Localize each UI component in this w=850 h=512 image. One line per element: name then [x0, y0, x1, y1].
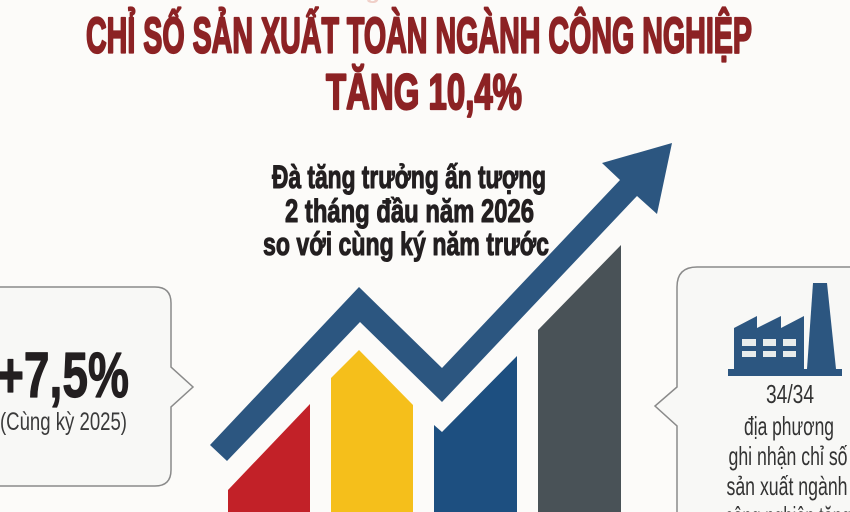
callout caption: (Cùng kỳ 2025) — [0, 408, 127, 436]
bar: red — [228, 404, 310, 512]
panel: localities callout — [655, 267, 850, 512]
bar: gray — [538, 245, 621, 512]
title: TĂNG 10,4% — [326, 64, 522, 120]
icon: factory — [728, 283, 842, 376]
subtitle text block — [263, 159, 549, 262]
callout text — [725, 379, 850, 512]
bar chart — [228, 245, 621, 512]
arrow: upward trend — [210, 143, 672, 461]
bar: yellow — [331, 350, 413, 512]
panel: previous-year callout — [0, 287, 193, 486]
bar: blue — [434, 356, 517, 512]
subtitle text block: 2 tháng đầu năm 2026 — [285, 193, 534, 229]
callout text: 34/34 — [766, 379, 814, 409]
title — [86, 6, 752, 120]
subtitle text block: Đà tăng trưởng ấn tượng — [272, 159, 546, 195]
subtitle text block: so với cùng ký năm trước — [263, 226, 549, 262]
callout value: +7,5% — [0, 339, 129, 411]
